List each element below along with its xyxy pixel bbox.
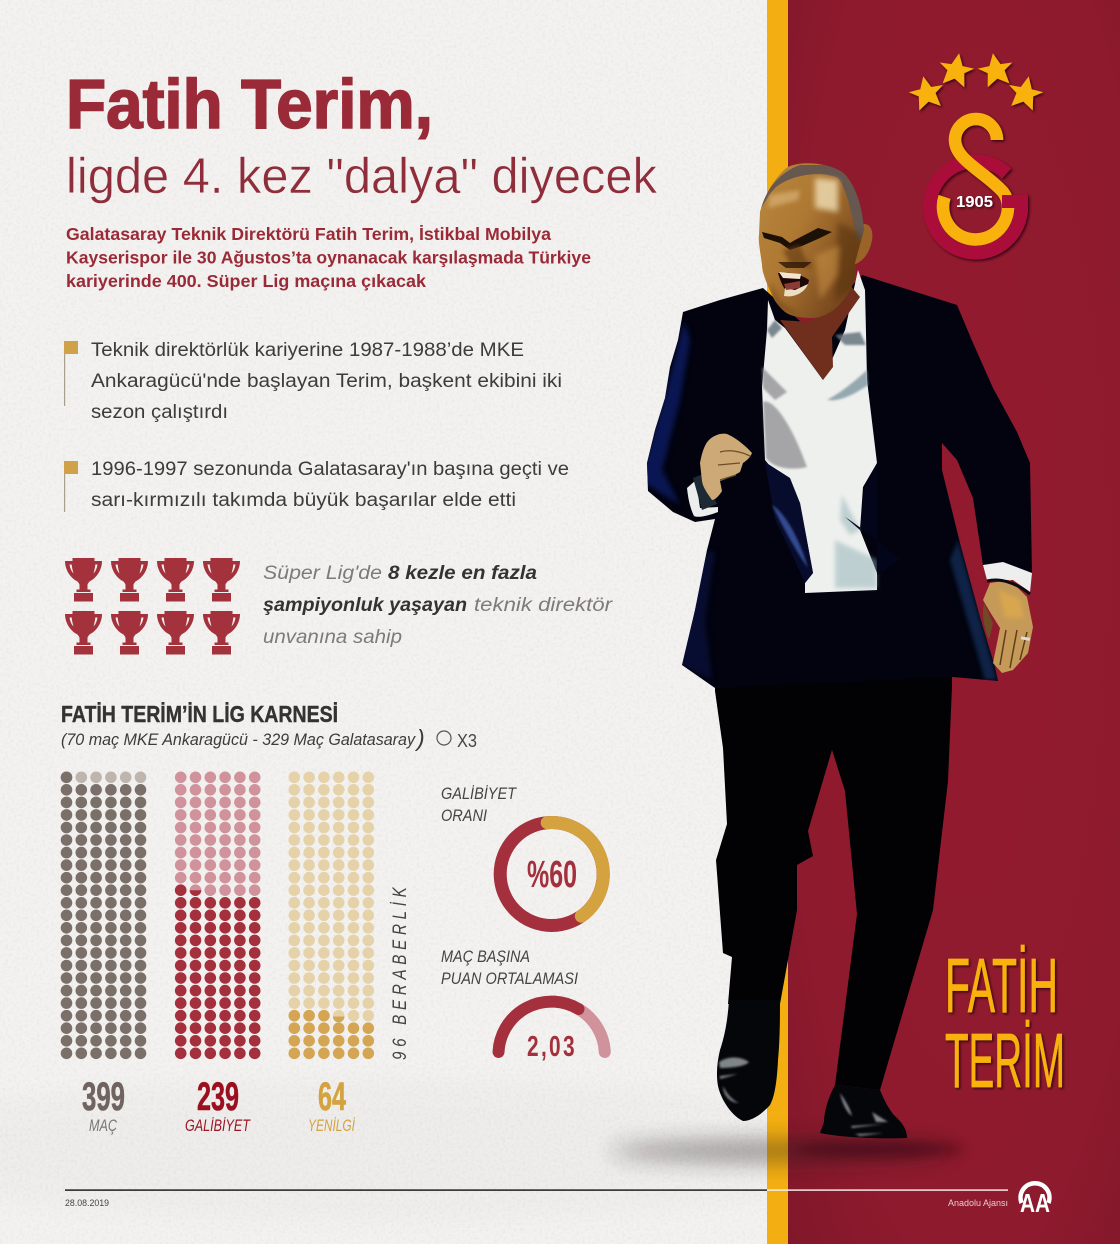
- stat: losses: YENİLGİ: [308, 1116, 355, 1135]
- right hand: [983, 580, 1033, 673]
- gauge chart: points per match: [498, 1002, 605, 1063]
- bullet marker 1: [64, 341, 78, 406]
- head: [758, 163, 864, 318]
- club crest: [906, 50, 1046, 253]
- label: points per match: PUAN ORTALAMASI: [441, 969, 578, 988]
- intro paragraph: Galatasaray Teknik Direktörü Fatih Terim, İstikbal Mobilya: [66, 224, 551, 244]
- name label: [945, 943, 1065, 1104]
- stat: matches: 399: [82, 1075, 125, 1119]
- bullet list: [64, 340, 569, 512]
- chart heading: ): [414, 725, 425, 751]
- yellow vertical band: [767, 0, 788, 1244]
- championship text: unvanına sahip: [263, 627, 402, 648]
- title line 2: ligde 4. kez "dalya" diyecek: [66, 148, 658, 204]
- agency name: Anadolu Ajansı: [948, 1198, 1008, 1209]
- bullet text 2: [91, 459, 569, 511]
- label: points per match: [441, 947, 578, 988]
- stat: losses: [308, 1075, 355, 1135]
- stat: wins: 239: [197, 1075, 239, 1119]
- label: win rate: ORANI: [441, 806, 487, 825]
- date: 28.08.2019: [65, 1198, 109, 1209]
- left shoe: [717, 1000, 780, 1121]
- label: win rate: GALİBİYET: [441, 784, 517, 803]
- right shoe: [820, 1085, 907, 1138]
- shirt: [762, 270, 900, 593]
- stat: matches: [82, 1075, 125, 1135]
- jacket highlights: [640, 320, 997, 680]
- intro paragraph: kariyerinde 400. Süper Lig maçına çıkacak: [66, 271, 426, 291]
- vertical label: draws: 96 BERABERLİK: [388, 886, 410, 1060]
- chart heading: [61, 701, 425, 751]
- label: points per match: MAÇ BAŞINA: [441, 947, 530, 966]
- championship text: Süper Lig'de: [263, 563, 382, 584]
- footer line: [65, 1189, 1008, 1191]
- crest year: 1905: [956, 194, 993, 211]
- bullet text 1: Ankaragücü'nde başlayan Terim, başkent ekibini iki: [91, 371, 562, 392]
- dot chart: matches: [61, 772, 146, 1059]
- trousers: [715, 590, 952, 1090]
- legend: one dot equals three: [437, 731, 477, 751]
- bullet text 2: sarı-kırmızılı takımda büyük başarılar elde etti: [91, 490, 516, 511]
- bullet text 1: sezon çalıştırdı: [91, 402, 228, 423]
- chart heading: FATİH TERİM’İN LİG KARNESİ: [61, 701, 338, 727]
- intro paragraph: [66, 224, 591, 291]
- stat: matches: MAÇ: [89, 1116, 118, 1135]
- left fist: [700, 434, 752, 500]
- championship text: teknik direktör: [474, 595, 613, 616]
- donut chart: win rate: [500, 822, 603, 926]
- dot chart: wins: [175, 772, 260, 1059]
- icon: agency logo: AA: [1020, 1188, 1050, 1218]
- stat: wins: GALİBİYET: [185, 1116, 251, 1135]
- bullet marker 2: [64, 461, 78, 512]
- right cuff: [983, 562, 1032, 592]
- gauge chart: points per match: 2,03: [527, 1031, 575, 1063]
- crest stars: [906, 50, 1046, 112]
- ground shadow: [610, 1140, 965, 1162]
- title: [66, 65, 658, 204]
- stat: losses: 64: [318, 1075, 346, 1119]
- portrait: Fatih Terim: [640, 160, 1033, 1138]
- intro paragraph: Kayserispor ile 30 Ağustos’ta oynanacak karşılaşmada Türkiye: [66, 248, 591, 268]
- label: win rate: [441, 784, 517, 825]
- crest emblem: [930, 119, 1028, 253]
- jacket: [647, 275, 1032, 688]
- championship text: [263, 563, 613, 648]
- stat: wins: [185, 1075, 251, 1135]
- left cuff and watch: [687, 474, 718, 517]
- neck: [780, 285, 860, 380]
- championship text: şampiyonluk yaşayan: [263, 595, 467, 616]
- bullet text 1: Teknik direktörlük kariyerine 1987-1988’de MKE: [91, 340, 524, 361]
- championship text: 8 kezle en fazla: [388, 563, 537, 584]
- icons: eight trophies: [65, 558, 240, 654]
- title line 1: Fatih Terim,: [66, 65, 433, 143]
- ear: [852, 224, 872, 265]
- dot chart: losses: [288, 772, 374, 1059]
- bullet text 2: 1996-1997 sezonunda Galatasaray'ın başına geçti ve: [91, 459, 569, 480]
- bullet text 1: [91, 340, 562, 423]
- chart heading: (70 maç MKE Ankaragücü - 329 Maç Galatasaray: [61, 730, 416, 749]
- red panel: [788, 0, 1120, 1244]
- donut chart: win rate: %60: [527, 854, 577, 896]
- legend: one dot equals three: X3: [457, 731, 477, 751]
